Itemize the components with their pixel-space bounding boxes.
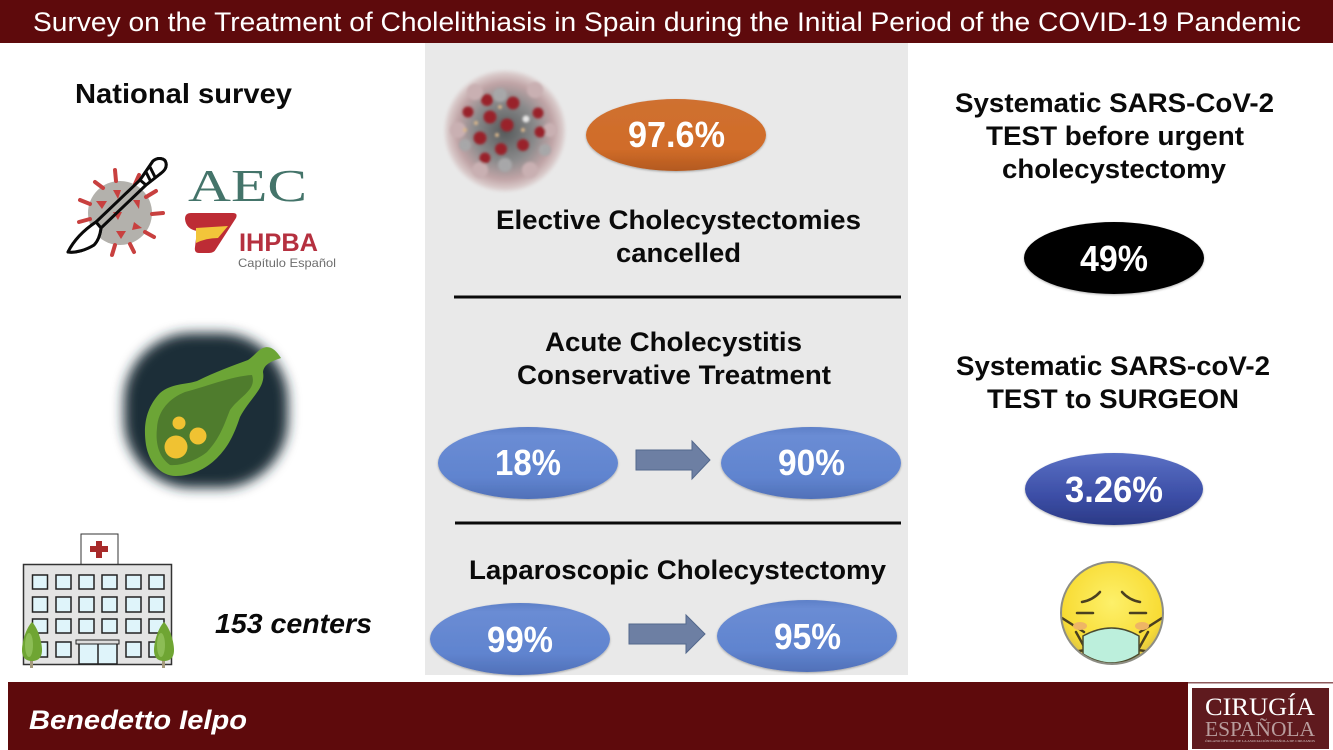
heading: systematic test before urgent cholecystectomy: cholecystectomy bbox=[1002, 154, 1226, 184]
heading: systematic test to surgeon: TEST to SURGEON bbox=[987, 384, 1239, 414]
badge: 18%: 18% bbox=[495, 442, 561, 483]
badge: 90%: 90% bbox=[778, 442, 845, 483]
heading: acute cholecystitis conservative treatment bbox=[517, 327, 831, 390]
title: Survey on the Treatment of Cholelithiasis in Spain during the Initial Period of the COVID-19 Pandemic bbox=[33, 7, 1301, 37]
badge: 95% bbox=[717, 600, 897, 672]
badge: 90% bbox=[721, 427, 901, 499]
badge: 3.26% bbox=[1025, 453, 1203, 525]
logo: IHPBA Capitulo Espanol: IHPBA bbox=[239, 229, 318, 257]
hospital sign bbox=[81, 534, 118, 565]
badge: 3.26%: 3.26% bbox=[1065, 469, 1163, 510]
badge: 99%: 99% bbox=[487, 619, 553, 660]
footer bar bbox=[8, 682, 1188, 750]
logo: Cirugia Espanola: CIRUGÍA bbox=[1205, 693, 1315, 721]
logo: AEC: AEC bbox=[188, 160, 307, 211]
icon: coronavirus bbox=[443, 69, 567, 193]
heading: systematic test before urgent cholecystectomy bbox=[955, 88, 1274, 184]
heading: acute cholecystitis conservative treatment: Acute Cholecystitis bbox=[545, 327, 802, 357]
icon: face with mask bbox=[1061, 562, 1163, 664]
heading: systematic test before urgent cholecystectomy: Systematic SARS-CoV-2 bbox=[955, 88, 1274, 118]
heading: systematic test before urgent cholecystectomy: TEST before urgent bbox=[986, 121, 1244, 151]
author: Benedetto Ielpo bbox=[29, 705, 247, 735]
heading: elective cholecystectomies cancelled bbox=[496, 205, 861, 268]
text: 153 centers: 153 centers bbox=[215, 608, 372, 639]
heading: acute cholecystitis conservative treatment: Conservative Treatment bbox=[517, 360, 831, 390]
badge: 49% bbox=[1024, 222, 1204, 294]
logo: Cirugia Espanola bbox=[1188, 682, 1333, 750]
heading: systematic test to surgeon bbox=[956, 351, 1270, 414]
logo: IHPBA Capitulo Espanol bbox=[185, 213, 336, 270]
badge: 97.6% bbox=[586, 99, 766, 171]
heading: elective cholecystectomies cancelled: Elective Cholecystectomies bbox=[496, 205, 861, 235]
badge: 18% bbox=[438, 427, 618, 499]
top title bar bbox=[0, 0, 1333, 43]
logo: IHPBA Capitulo Espanol: Capítulo Español bbox=[238, 256, 336, 270]
heading: systematic test to surgeon: Systematic SARS-coV-2 bbox=[956, 351, 1270, 381]
heading: elective cholecystectomies cancelled: cancelled bbox=[616, 238, 741, 268]
icon: gallbladder with stones bbox=[124, 333, 288, 488]
panel: centre grey background bbox=[425, 43, 908, 675]
badge: 95%: 95% bbox=[774, 616, 841, 657]
heading: national survey: National survey bbox=[75, 78, 292, 109]
logo: Cirugia Espanola: ESPAÑOLA bbox=[1205, 717, 1316, 741]
arrow: 99 to 95 bbox=[629, 615, 705, 653]
trees bbox=[22, 622, 174, 668]
badge: 97.6%: 97.6% bbox=[628, 114, 725, 155]
logo: Cirugia Espanola: ÓRGANO OFICIAL DE LA ASOCIACIÓN ESPAÑOLA DE CIRUJANOS bbox=[1205, 738, 1315, 743]
badge: 49%: 49% bbox=[1080, 238, 1148, 279]
icon: virus with scalpel bbox=[68, 159, 166, 255]
badge: 99% bbox=[430, 603, 610, 675]
arrow: 18 to 90 bbox=[636, 441, 710, 479]
heading: laparoscopic cholecystectomy: Laparoscopic Cholecystectomy bbox=[469, 555, 886, 585]
icon: hospital bbox=[22, 534, 174, 668]
